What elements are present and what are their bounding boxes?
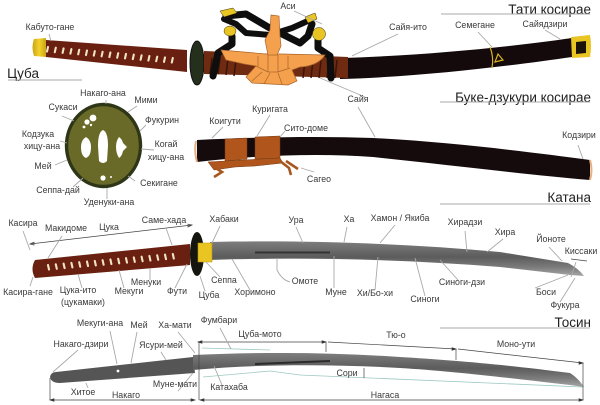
label: хицу-ана (24, 141, 60, 151)
panel: katana (3, 190, 597, 310)
label: Нагаса (371, 390, 399, 400)
label: Цука (99, 222, 119, 232)
label: Кодзири (562, 130, 596, 140)
label: Хитое (71, 387, 95, 397)
label: Фукура (550, 300, 580, 310)
label: Семегане (455, 20, 495, 30)
label: Сайя (347, 94, 369, 104)
blade (210, 241, 584, 276)
label: Хирадзи (448, 217, 482, 227)
label: Хи/Бо-хи (357, 288, 393, 298)
tsuba (190, 232, 204, 276)
label: Тю-о (386, 330, 406, 340)
label: Сито-доме (284, 123, 328, 133)
blade groove (255, 252, 330, 254)
label: Сагео (307, 174, 331, 184)
label: Хабаки (209, 214, 239, 224)
heading: buke-zukuri koshirae: Буке-дзукури косирае (455, 90, 591, 105)
blade groove (255, 361, 330, 364)
sageo ends (214, 161, 298, 177)
label: Омоте (292, 276, 318, 286)
label: Накаго (112, 390, 140, 400)
hilt binding diamonds (47, 47, 173, 62)
label: Мей (130, 320, 148, 330)
label: Мими (134, 95, 158, 105)
label: Кодзука (22, 129, 54, 139)
label: Накаго-дзири (54, 339, 109, 349)
tsuba disc (66, 104, 140, 186)
hilt (46, 40, 187, 72)
gold fittings (220, 8, 326, 40)
leaders (23, 225, 576, 302)
blade (193, 353, 584, 387)
label: Менуки (131, 277, 161, 287)
label: Секигане (140, 178, 178, 188)
label: Фукурин (145, 115, 179, 125)
leaders (49, 11, 560, 97)
label: Йоноте (536, 233, 566, 244)
label: Кабуто-гане (26, 22, 74, 32)
label: Киссаки (565, 246, 597, 256)
orange sageo knot (221, 15, 325, 85)
leaders (55, 100, 154, 199)
label: Цука-ито (60, 285, 96, 295)
label: Хоримоно (234, 287, 276, 297)
heading: tsuba (7, 66, 82, 81)
heading: katana: Катана (547, 190, 591, 205)
label: Сукаси (48, 102, 78, 112)
kissaki arrow (571, 259, 587, 261)
label: Коигути (209, 116, 241, 126)
leaders (53, 328, 231, 391)
label: Касира-гане (3, 287, 53, 297)
label: Сеппа-дай (36, 185, 80, 195)
label: Касира (8, 218, 38, 228)
tang hole (117, 370, 119, 372)
scabbard (340, 38, 572, 79)
label: Мекуги-ана (77, 318, 123, 328)
teal curvature lines (202, 348, 583, 387)
label: Моно-ути (497, 339, 535, 349)
orange cord wraps (208, 136, 283, 170)
label: Саме-хада (142, 215, 186, 225)
label: Ясури-мей (139, 340, 183, 350)
label: Сайя-ито (389, 22, 427, 32)
leaders (212, 107, 583, 172)
panel: tosin (50, 315, 591, 401)
label: Уденуки-ана (84, 197, 134, 207)
label: Ха-мати (158, 320, 192, 330)
tsuba side view (190, 41, 204, 85)
label: Когай (155, 139, 178, 149)
label: Аси (280, 1, 296, 11)
heading: tsuba: Цуба (7, 66, 39, 81)
label: Макидоме (45, 223, 87, 233)
tsuba holes (81, 115, 127, 181)
label: Сайядзири (523, 19, 568, 29)
label: Ха (344, 214, 354, 224)
label: Цуба (199, 290, 219, 300)
label: Сори (336, 368, 358, 378)
label: Фумбари (201, 315, 237, 325)
heading: tati koshirae: Тати косирае (508, 2, 591, 17)
panel: buke-zukuri koshirae (195, 90, 596, 184)
dimension lines (50, 341, 583, 401)
label: Мекуги (115, 286, 143, 296)
label: Катахаба (210, 382, 248, 392)
label: Куригата (252, 104, 288, 114)
label: Накаго-ана (80, 88, 126, 98)
label: Мей (34, 161, 52, 171)
hilt (32, 244, 190, 278)
scabbard tip (571, 35, 591, 58)
label: Муне (325, 287, 347, 297)
label: (цукамаки) (61, 297, 105, 307)
heading: tosin: Тосин (555, 315, 591, 330)
panel: tati koshirae (26, 1, 591, 104)
tsuka dimension arrow (30, 224, 192, 245)
label: Хамон / Якиба (371, 213, 429, 223)
tang (50, 357, 195, 383)
semegane (490, 47, 503, 68)
label: Цуба-мото (238, 329, 282, 339)
label: Синоги-дзи (439, 277, 485, 287)
black hanger cords (213, 14, 331, 78)
panel: tsuba diagram (7, 66, 184, 207)
label: Хира (495, 227, 515, 237)
hanger section of the hilt and scabbard (204, 51, 348, 78)
label: хицу-ана (148, 152, 184, 162)
label: Муне-мати (153, 379, 197, 389)
scabbard (197, 137, 590, 180)
labels: hilt (3, 214, 239, 307)
hilt binding diamonds (48, 254, 174, 270)
label: Сеппа (211, 275, 237, 285)
label: Фути (167, 286, 187, 296)
label: Ура (289, 215, 304, 225)
pommel (32, 38, 46, 57)
scabbard ends (195, 141, 591, 180)
stripes on hanger section (210, 58, 337, 78)
label: Синоги (410, 294, 440, 304)
habaki (198, 243, 212, 262)
label: Боси (536, 287, 556, 297)
labels: blade (234, 213, 597, 310)
